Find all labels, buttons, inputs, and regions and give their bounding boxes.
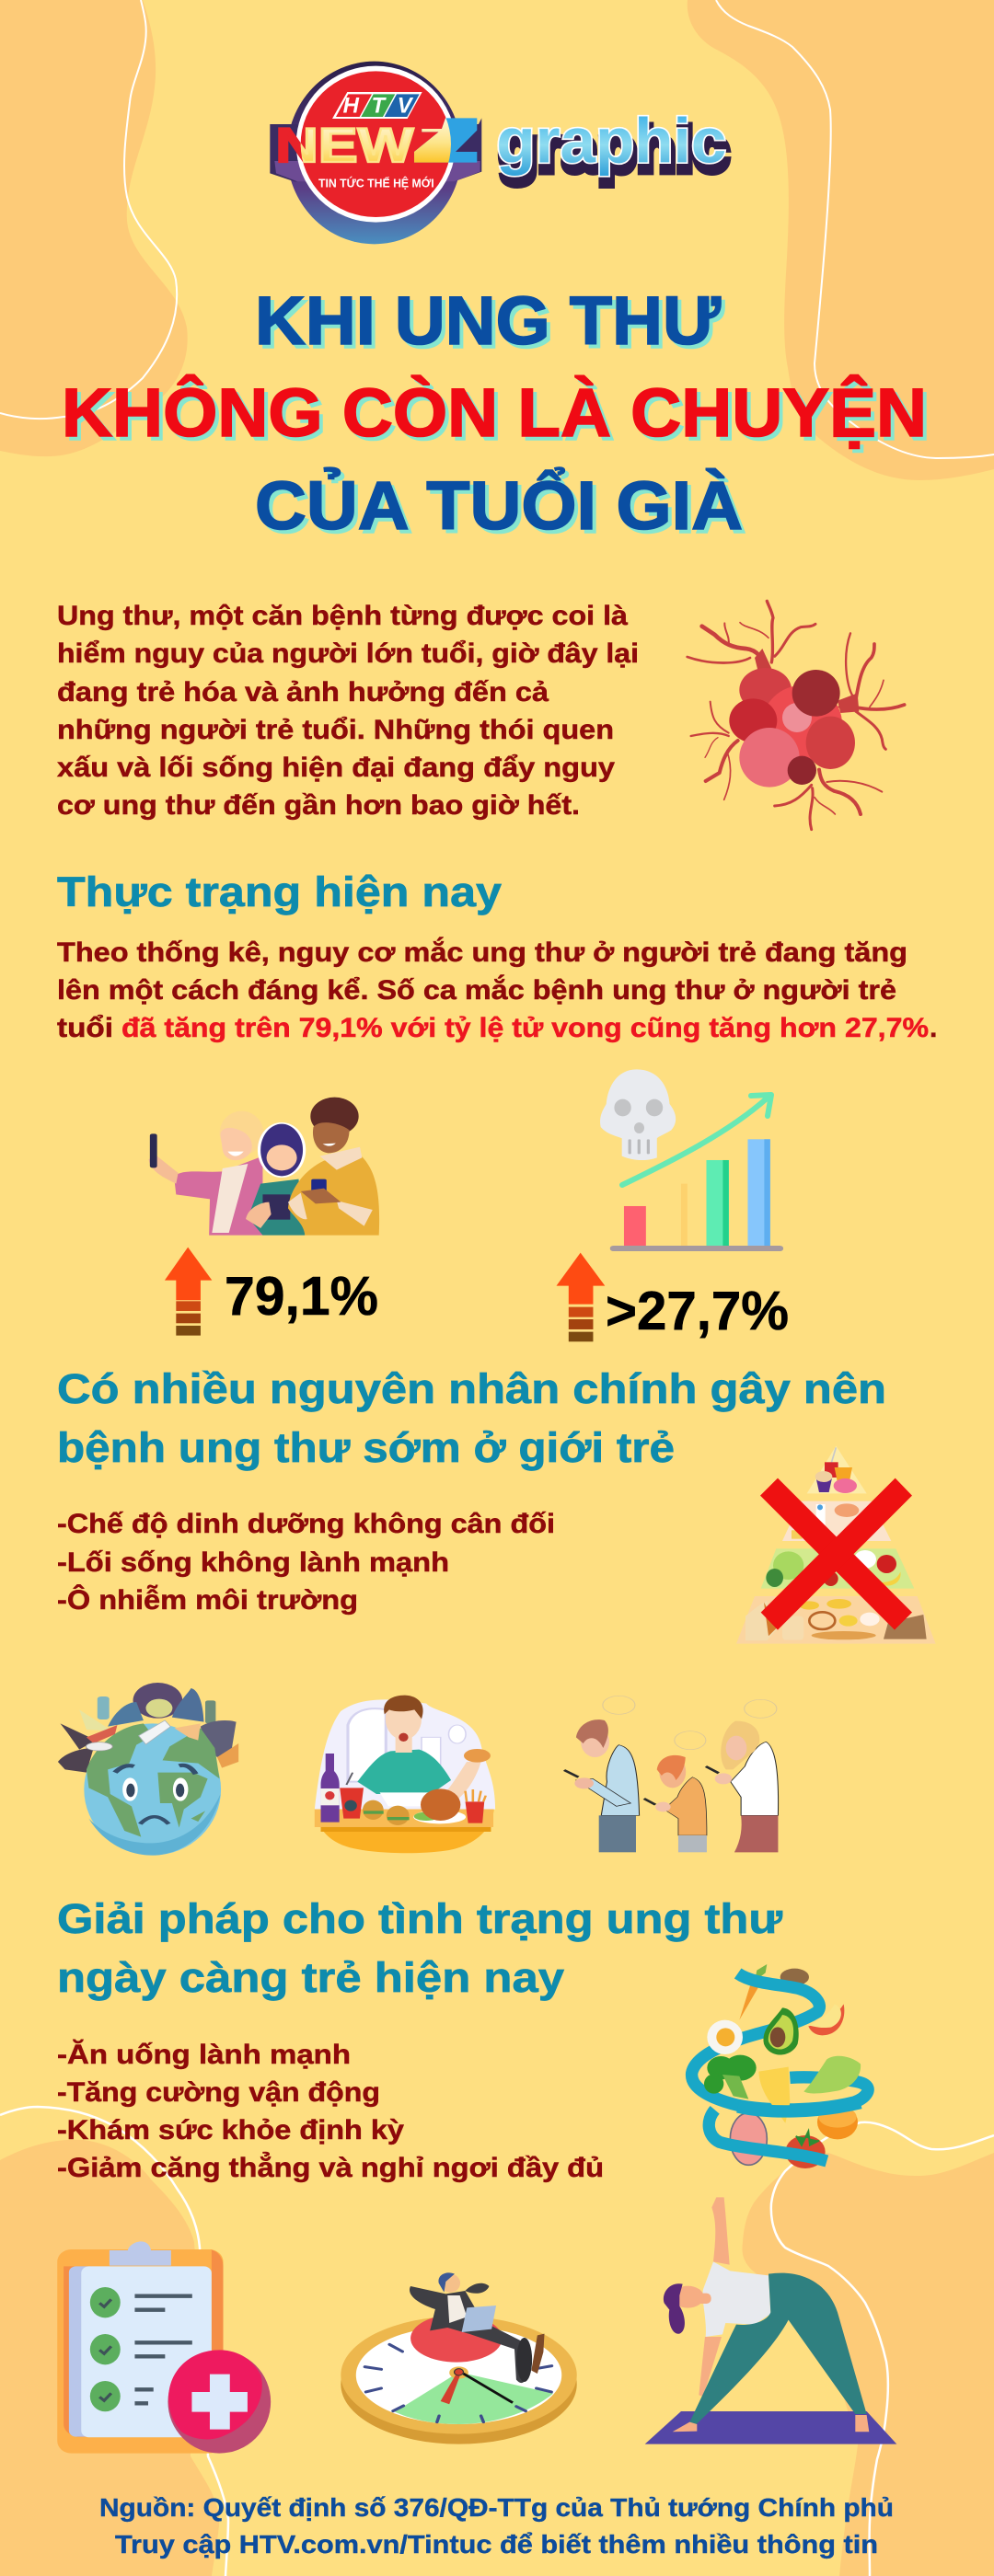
icon: rising arrow 27,7% — [557, 1253, 605, 1341]
icon: tumour — [688, 601, 905, 830]
heading: current situation: Thực trạng hiện nay — [57, 868, 502, 915]
arrow: growth trend — [622, 1095, 771, 1185]
check items — [90, 2287, 192, 2411]
list: solutions: -Tăng cường vận động — [57, 2077, 380, 2108]
intro paragraph — [57, 601, 639, 821]
list: solutions — [57, 2039, 604, 2183]
list: causes: -Lối sống không lành mạnh — [57, 1547, 449, 1578]
chart: rising bars — [610, 1095, 783, 1251]
intro paragraph: hiểm nguy của người lớn tuổi, giờ đây lại — [57, 638, 639, 669]
heading: causes: Có nhiều nguyên nhân chính gây nên — [57, 1365, 886, 1412]
title: KHÔNG CÒN LÀ CHUYỆN — [62, 374, 927, 451]
background blob: bottom left — [0, 2140, 219, 2576]
background blob: bottom right — [742, 2153, 994, 2576]
situation paragraph: tuổi — [57, 1013, 113, 1043]
source footer: Truy cập HTV.com.vn/Tintuc để biết thêm nhiều thông tin — [115, 2530, 878, 2559]
background blob: top right — [688, 0, 994, 480]
situation paragraph: Theo thống kê, nguy cơ mắc ung thư ở người trẻ đang tăng — [57, 937, 907, 968]
intro paragraph: những người trẻ tuổi. Những thói quen — [57, 715, 614, 745]
title: CỦA TUỔI GIÀ — [255, 467, 743, 544]
heading: solutions: ngày càng trẻ hiện nay — [57, 1954, 564, 2001]
plus badge — [168, 2350, 271, 2454]
stat: >27,7%: >27,7% — [606, 1281, 789, 1341]
boy with phone — [644, 1731, 707, 1852]
heading: solutions: Giải pháp cho tình trạng ung thư — [57, 1895, 782, 1942]
icon: food pyramid crossed out — [736, 1446, 936, 1644]
title: KHI UNG THƯ — [255, 282, 722, 359]
intro paragraph: cơ ung thư đến gần hơn bao giờ hết. — [57, 790, 580, 821]
source footer: Nguồn: Quyết định số 376/QĐ-TTg của Thủ tướng Chính phủ — [99, 2493, 894, 2522]
graphic wordmark: graphic — [499, 116, 729, 186]
decorative line: bottom right — [771, 2122, 994, 2576]
intro paragraph: xấu và lối sống hiện đại đang đẩy nguy — [57, 753, 615, 783]
logo: HTV NEWZ graphic — [270, 62, 729, 244]
HTV mark: HTV — [343, 94, 414, 119]
tagline: TIN TỨC THẾ HỆ MỚI — [318, 177, 434, 190]
icon: relaxing man on clock — [341, 2272, 577, 2444]
NEWZ wordmark — [278, 118, 477, 164]
icon: young people with phones — [148, 1098, 379, 1236]
situation paragraph: đã tăng trên 79,1% với tỷ lệ tử vong cũng tăng hơn 27,7% — [121, 1013, 929, 1043]
icon: skull — [600, 1069, 676, 1160]
list: causes — [57, 1509, 555, 1616]
list: solutions: -Khám sức khỏe định kỳ — [57, 2115, 404, 2145]
intro paragraph: đang trẻ hóa và ảnh hưởng đến cả — [57, 677, 549, 707]
NEWZ wordmark: NEW — [275, 119, 414, 173]
decorative line: top right — [716, 0, 994, 458]
icon: healthy food and measuring tape — [692, 1964, 868, 2168]
decorative line: top left — [0, 0, 177, 419]
list: causes: -Chế độ dinh dưỡng không cân đối — [57, 1509, 555, 1539]
woman with phone — [706, 1699, 779, 1852]
intro paragraph: Ung thư, một căn bệnh từng được coi là — [57, 601, 628, 631]
stat: 79,1%: 79,1% — [225, 1266, 378, 1327]
icon: people looking at phones — [564, 1696, 779, 1852]
background blob: top left — [0, 0, 188, 456]
logo badge — [270, 62, 481, 244]
decorative line: bottom left — [0, 2107, 228, 2576]
icon: yoga pose — [645, 2197, 896, 2444]
situation paragraph: lên một cách đáng kể. Số ca mắc bệnh ung thư ở người trẻ — [57, 974, 896, 1006]
list: solutions: -Giảm căng thẳng và nghỉ ngơi đầy đủ — [57, 2152, 604, 2183]
title — [62, 282, 927, 544]
heading: causes: bệnh ung thư sớm ở giới trẻ — [57, 1424, 675, 1471]
source footer — [99, 2493, 894, 2559]
graphic wordmark: graphic — [496, 107, 726, 177]
situation paragraph — [57, 937, 937, 1043]
icon: rising arrow 79,1% — [165, 1248, 212, 1336]
red cross — [760, 1478, 912, 1630]
icon: man eating junk food — [315, 1696, 495, 1853]
situation paragraph: . — [930, 1013, 937, 1043]
icon: polluted earth — [58, 1683, 238, 1856]
NEWZ wordmark: NEW — [275, 119, 414, 173]
heading: solutions — [57, 1895, 782, 2001]
list: causes: -Ô nhiễm môi trường — [57, 1584, 358, 1616]
heading: causes — [57, 1365, 886, 1471]
man with phone — [564, 1696, 640, 1852]
list: solutions: -Ăn uống lành mạnh — [57, 2039, 351, 2070]
icon: medical checklist — [57, 2241, 271, 2454]
